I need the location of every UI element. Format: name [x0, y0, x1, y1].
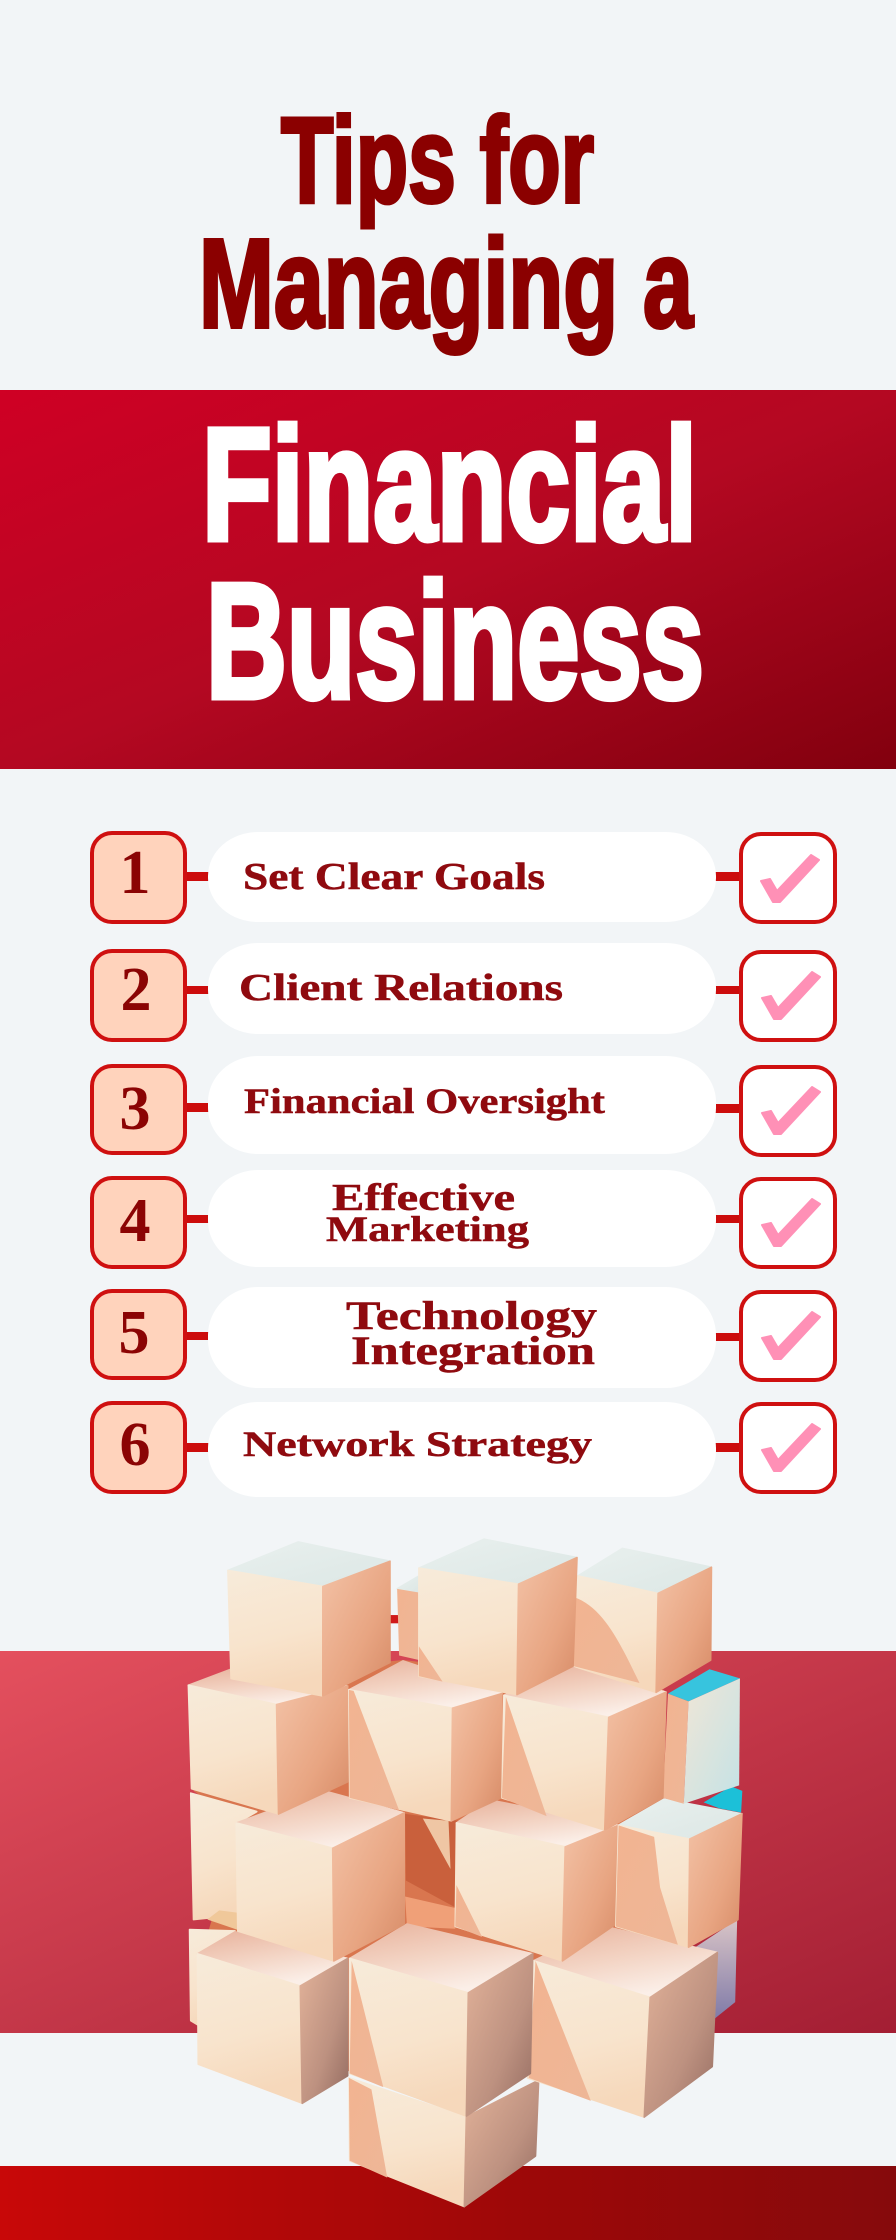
row 3: Financial Oversight: [92, 1056, 835, 1155]
row 4: Effective Marketing: Marketing: [326, 1209, 529, 1249]
illustration: stack of cream cubes: [188, 1539, 742, 2207]
row 6: Network Strategy: 6: [120, 1411, 150, 1479]
row 4: Effective Marketing: [92, 1170, 835, 1267]
row 1: Set Clear Goals: [92, 832, 835, 922]
row 4: Effective Marketing: Effective: [332, 1177, 515, 1219]
title: Tips for Managing a: [199, 92, 694, 354]
row 1: Set Clear Goals: Set Clear Goals: [243, 856, 545, 898]
list: six tips: [92, 832, 835, 1497]
row 6: Network Strategy: Network Strategy: [243, 1424, 592, 1464]
banner title: Financial Business: [202, 394, 704, 732]
row 2: Client Relations: Client Relations: [239, 967, 563, 1009]
title: Tips for Managing a: Tips for: [281, 92, 594, 228]
banner: red band: [0, 390, 896, 769]
row 3: Financial Oversight: Financial Oversight: [244, 1081, 605, 1121]
band: pink-red backdrop: [0, 1651, 896, 2033]
row 5: Technology Integration: 5: [118, 1299, 150, 1367]
band: dark red footer: [0, 2166, 896, 2240]
row 2: Client Relations: [92, 943, 835, 1040]
banner title: Financial Business: Financial: [202, 394, 697, 574]
row 1: Set Clear Goals: 1: [120, 839, 150, 907]
row 3: Financial Oversight: 3: [120, 1075, 150, 1143]
row 5: Technology Integration: [92, 1287, 835, 1388]
row 5: Technology Integration: Integration: [351, 1328, 595, 1373]
row 4: Effective Marketing: 4: [120, 1187, 150, 1255]
row 5: Technology Integration: Technology: [346, 1293, 597, 1338]
title: Tips for Managing a: Managing a: [199, 213, 694, 354]
row 2: Client Relations: 2: [120, 956, 152, 1024]
row 6: Network Strategy: [92, 1402, 835, 1497]
